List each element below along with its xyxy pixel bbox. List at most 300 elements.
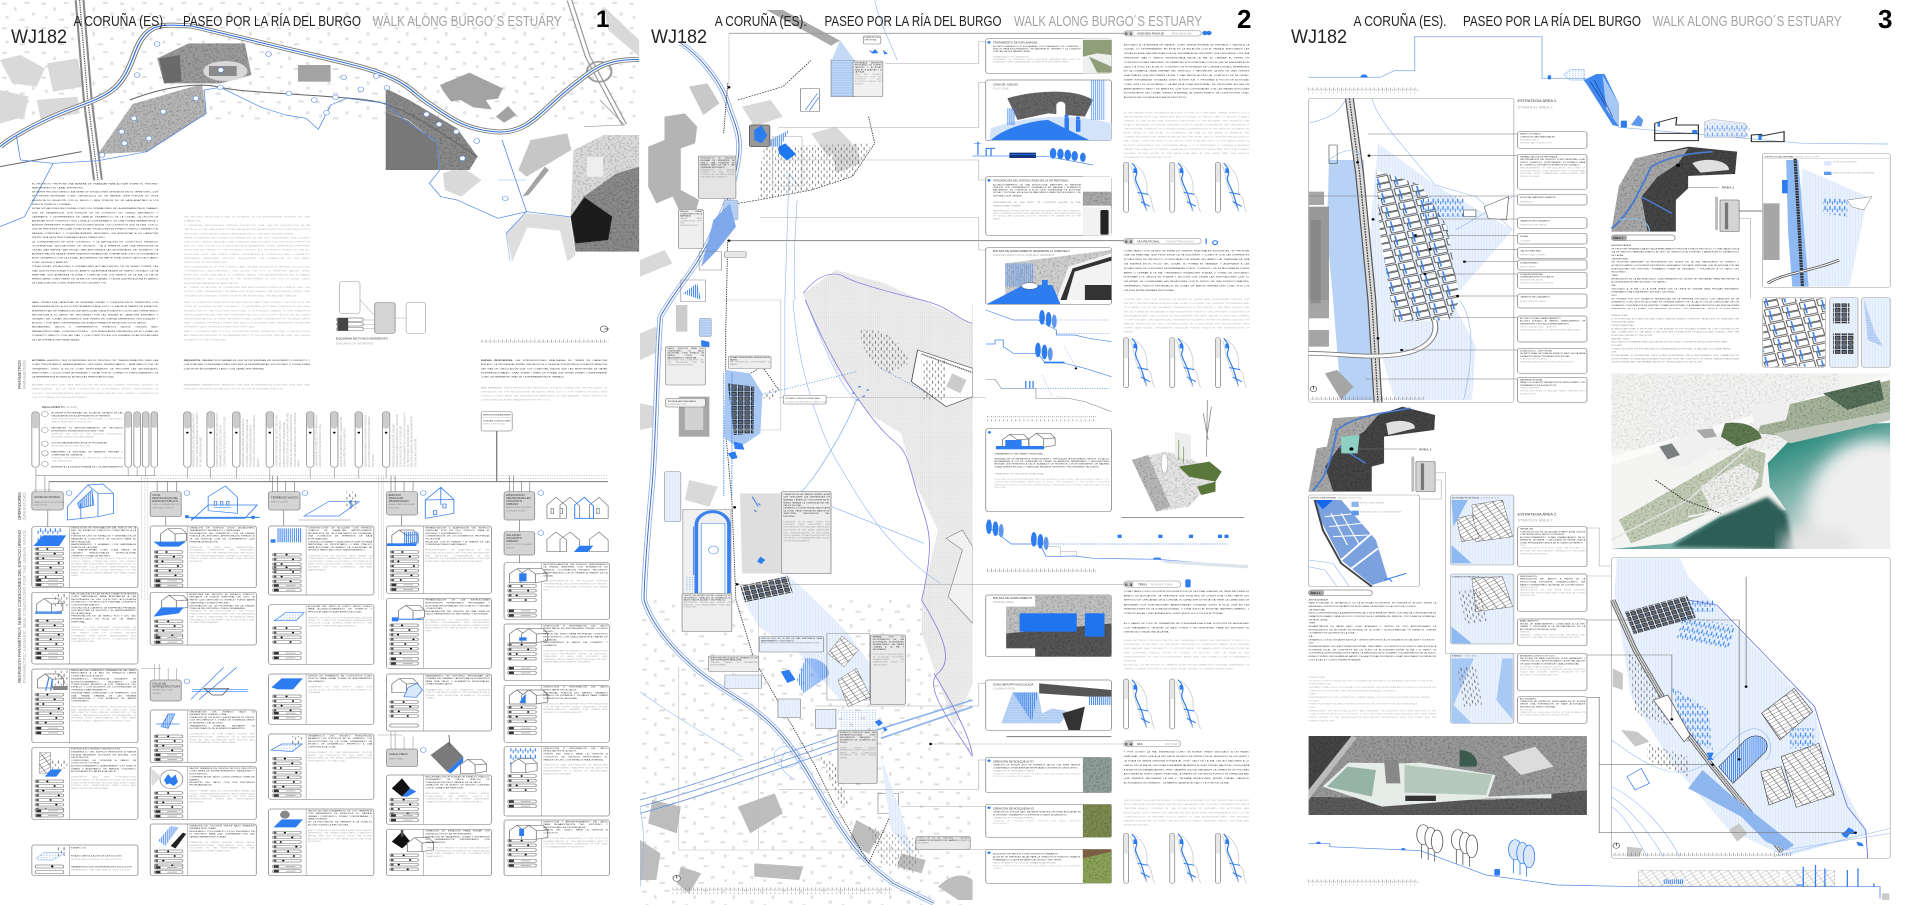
text area 1 english: IT IS PROPOSED A CONNECTED AND PUBLIC PARKING AREA TO IMPROVE THE ACCESS OF ROAD AND THE RESIDENTIAL AREA. [1611,318,1739,323]
card 1.1: DEMOLITION AND CONNECTION OF THE SITE IN THE PUBLIC SPACE CONNECTED WITH THE STREET. MOVING THE SPACE AND GENERATING STOPS TO NEIGHBOUR COLLECTIVES. MAINTENANCE AND FINISH WITH NOBLE LOCAL MATERIALS OF THE AREA. PRODUCE GREEN AREAS FOR TRADITIONAL CARE. [71,557,136,577]
text ria spanish: Y POR ÚLTIMO LA RÍA. ENTENDIDA COMO UN BORDE GRATO ASOCIADO A UN PASEO PEATONAL, PERO QUE A LA VEZ SIRVE DE NEXO DE UNIÓN CON EL MUNICIPIO DE CULLEIRO Y LA PLAYA DE SANTA CRISTINA SITUADA AL OTRO LADO DE LA RÍA. LAS ACTUACIONES A LO LARGO DE LA RÍA SE VINCULAN FUNDAMENTALMENTE A LA ACTIVIDAD NÁUTICA O PESQUERA A NIVELES DE EMBARCADERO, PERO TAMBIÉN LÚDICA, MEDIANTE LA CREACIÓN DE PISCINAS ASOCIADAS AL NUEVO PASEO PEATONAL. A TRAVÉS DE DISTINTOS PUNTOS SE OBRA UNA RED QUE PERMITE RECORRER LA RÍA Y CELEBRA RELACIONES ENTRE PLAYAS, PAISEOS, ACTIVIDADES CULTURALES... DESARROLLADAS A UN LADO Y A OTRO DE LA RÍA. [1124,751,1249,784]
card: bolsas de aparcamiento 2: BOLSAS DE APARCAMIENTO [993,596,1032,600]
diagram of working [336,282,426,346]
plan: scale [1311,397,1425,402]
card: creacion de bosque bajo: CREACIÓN DE BOSQUE BAJO MEDIANTE MURETES, MIXTURAS ASOCIADAS EN EL ENTORNO. TRATAMIENTO CON ESPECIE LOCALES DE ARBUSTOS. [993,811,1081,816]
tag area 1 [1611,235,1675,241]
text area 2 spanish: AVENIDA PASAJE [1309,599,1328,601]
box: parcelacion: PARCELACIÓN [1520,576,1537,578]
text area 1 english: IN THE AREAS OF RESIDENTIAL USES, A NEW RESIDENTIAL USE IS ENCOURAGED WITH CHARACTER OF DEVELOPMENT. HOUSING ACTIONS ARE PROPOSED WITH THE COMPLICITY OF USERS, GARDEN SPACES AND SPORTS AREAS, AND THE REHABILITATION OF THE BUILDINGS ON THE SLOPE. [1611,355,1739,363]
middle band panel 1: parameters and operators [32,282,609,600]
card 4.4: CREACIÓN DE UN MUNDO DE NIVELES COMUNES CON EL CARÁCTER REMOLINO. [425,784,490,789]
diagram of working: ESQUEMA DE FUNCIONAMIENTO [336,337,389,341]
rules legend: RESPECT THE IDENTITY OF THE ROOFS, THE STONE AND THE LANDSCAPE [51,457,123,462]
scale bar [481,339,608,345]
strategy tile: actividad economica: ACTIVIDAD ECONÓMICA [1452,497,1479,499]
text area 1 spanish: RÍA [1611,285,1615,287]
text area 2 english: TRAIN [1309,693,1316,695]
strategy tile: actividad economica [1451,495,1514,565]
operator: calle ciega: PARTY WALL [389,758,405,760]
title panel 3: WALK ALONG BURGO´S ESTUARY [1653,13,1842,30]
plan: large factory [648,113,699,213]
text area 1 english [1611,314,1739,368]
box: zona residencial: VIVIENDA EN ESTOS LLANOS [1520,276,1553,278]
rules legend: MANTENER LA IDENTIDAD DE PAISAJES, PIEDRAS Y CUBIERTAS DE CUBIERTA [51,451,123,456]
small maps road [1124,162,1247,212]
section tag 01 avenida pasaje: 01 [1125,31,1133,36]
card 1.1: DEMOLICIÓN DE INTEGRACIÓN DEL HUECO EN LA RED DE ESPACIOS PÚBLICOS CONECTADOS A LA CALLE. [71,527,136,535]
text tren english: A RAIL NETWORK CROSSES THE PROJECT AREA AND CONNECTING DIFFERENT TOWNS. IT IS PRETENDED TO BE PART OF THE WIDER NETWORK OF COMMUTER TRAINS OF A CORUÑA. THIS RAILWAY HAS THE ABILITY TO INCORPORATE TWO ABANDONED CONSTRUCTIONS AS NEW STOPPING PLACES CLOSE TO POINTS OF ACTIVITY, ONE OF THEM IN THE SURROUNDINGS OF THE OLD INDUSTRIAL AREA, AND THE OTHER CLOSE TO MATERNITY HOSPITAL. [1124,639,1249,662]
intro text english: THE CONSIDERATION OF THIS CONTEXT, AND THE AMPLIFICATION OF PRIVATE COLLECTIVES, COOPERATIVES, ASSOCIATIONS,... WILL ALLOW THE CITY TO RESPOND FASTER, MORE EFFECTIVE, MORE ADAPTABLE TO CURRENT NEEDS. THE ADMINISTRATION HAS A SHARED RESPONSIBILITY WITH CITIZENS IN THE DEVELOPMENT OF THE CITY, IN SOME CASES WORKING AS MANAGER OR ARBITRATOR. [184,266,310,284]
area 1 summary box [1715,197,1762,298]
card 5.2: CESIÓN DEL SUELO PARA PROPIEDAD Y HUERTOS EN CONJUNTO, CON UNA CONEXIÓN A TRAVÉS DE LA UNIDAD. [543,633,608,641]
card 1.5: legend: PARÁMETROS QUE INTERVIENEN EN LA SOLUCIÓN [71,866,132,868]
title panel 1: A CORUÑA (ES). [74,13,166,30]
card: alquiler de vacios [986,849,1111,883]
operator cards panel 1 lower rows [32,563,609,876]
intro text english: THE PROJECT PROPOSES A WAY OF WORKING IN THE ENVIRONMENT KEEPING ITS OWN CHARACTER. [184,216,310,222]
card 1.5: legend: EJEMPLO 1/1 [71,848,87,850]
box: aprovechamiento: BOLSA DE APARCAMIENTO CONECTADA A LA RED VIARIA Y VINCULADA A LA REVITALIZACIÓN DE LA ACTIVIDAD ECONÓMICA LOCAL. [1520,623,1585,631]
aerial photo area 2 lots [1309,736,1587,815]
card: creacion de bosque bajo [986,804,1111,837]
box: parcelacion: PARCELLATION [1520,587,1538,589]
render: green land [1619,447,1766,543]
box: apeadero centro de ocio [1518,653,1587,691]
text area 2 spanish: DESARROLLO DE ACTIVIDADES NÁUTICA Y CENTRO DEPORTIVO A LOS USUARIOS DE CALLAGE Y COLEGIOS. [1309,639,1435,641]
card: tratamiento de explanadas: TRATAMIENTO DE EXPLANADAS [993,41,1038,45]
card 3.5: EMPTY SPACES CONDITIONING LAND WITH WASTE MATERIALS, THE URBAN LANDSCAPE, COMMUNITY AREAS, AND FOR HOUSING. FROM THE ROUTE ALLOWS ACCESS TO THE AREA FROM THE ROAD NETWORK. [308,829,372,843]
plan: houses grid [1376,170,1460,322]
text area 1 spanish: REUBICACIÓN DE LA ANTIGUA CALLE COMO APEADERO DE LA RED DE CERCANÍAS, PARA FAVORECER LA ACCESIBILIDAD ENTRE LA CHUAC Y EL BARRIO. [1611,278,1739,283]
callout: sports neighbourhood: OPENING LINKED TO PROPERTIES DEVELOPMENT. [710,662,758,666]
rules legend [32,405,123,469]
card 5.1 [504,563,609,619]
title panel 3: PASEO POR LA RÍA DEL BURGO [1463,13,1641,30]
box: parcelacion: PARCELLATION OF THE AREA FROM EXISTING STRUCTURE DEVELOPING FACTORIES AND ALLOWING RESOURCES. [1520,589,1585,597]
card 2.3: CREACIÓN DE UN PUNTO SINGULAR EN EL CRUCE, CON RECORRIDOS Y ZONAS DE ESTANCIA DESDE EL MOMENTO DEL ACCESO. [189,716,255,724]
actors text: ACTORES: AGENTES QUE INTERVIENEN EN EL PROCESO DE TRANSFORMACIÓN, BIEN SEA COMO PROPIETARIOS, ARRENDATARIOS, GESTORES, BENEFICIARIOS,... ARBITRADOS POR UN ORGANISMO JUNTO A ELLOS COMO RESPONSABLES DE RECOGER LAS NECESIDADES, PERICIONES O SOLUCIONES APORTADAS Y VELAR POR EL CORRECTO FUNCIONAMIENTO DE LA HERRAMIENTA EN BASE A LAS REGLAS PREESTABLECIDAS. [32,359,158,378]
box: zona desnivel: ZONA DESAHÍO [1520,262,1539,265]
card 4.1: REHABILITACIÓN O ADAPTACIÓN DEL EDIFICIO SINGULAR POR UN USO PÚBLICO PARA EL ENTORNO Y EQUIPAMIENTOS. [425,527,490,535]
card 4.3: DISMANTLING OF THE PREMISES. PROMOTE PUBLIC USE AND FORMS OF THE ELEMENTS FOR A STREET AND MUNICIPAL ELEMENTS, SOJOURN ZONES. [425,689,490,699]
card: tratamiento del paseo peatonal: INTEGRACIÓN DE PAVIMENTOS HORIZONTALES Y VERTICALES (ESCENTRALES, MUROS, ZÓCALOS, MEDIANERAS) A LOS DE CUBIERTAS DE LIBRAR UN AMBIENTE PAVIMENTADO Y ADECUACIONES MEDIDAS QUE PERMITEN LA CALLE. ACABADOS DE HORMIGÓN CON RECUBRIMIENTO DE MADERA, ZONAS VERDES EN SUELO Y PARCELAS MEDIANTE CÉSPEDES Y RECUBRIMIENTO AL BORDE. [994,458,1109,468]
operator: calle ciega [378,732,487,773]
card 5.3: PROPIEDAD PÚBLICA DEL BARRIO, GANANDO ESPACIO DE ESTANCIA Y VISUALES PARA CUBRIR ELEMENTOS DE LA UNIDAD. [543,692,608,700]
box: zona desnivel: EMPTY AREA [1520,266,1536,269]
actors text: ACTORS: ENTITIES THAT TAKE PART IN THE PROCESS AS OWNERS, RENTERS, AGENTS OR BENEFICIARIES... ALL OF THEM CONTROLLED BY A DIFFERENT AGENCY RESPONSIBLE OF COLLECT THE REQUIREMENTS, AND SOLUTIONS AND ENSURE THE CORRECT OPERATION OF THE TOOL BASED ON THE RULES PRESET. [32,384,158,399]
site plan panel 2 [640,0,1124,905]
callout: maintenance: FIXED POINTS IN THE NETWORK OF PEDESTRIAN ROUTES. [761,642,820,644]
plan: large dashed guide rectangle [679,33,973,850]
operator: terrenos vacios [269,491,359,520]
plan: radial view lines [761,368,946,543]
text area 2 english: PEDESTRIAN ROAD [1309,683,1331,685]
card 3.3: TRANSFER OF THE EMPTY LAND FOR COLLECTIVES, AS POINTS FOR SETTLEMENT OF THE AREA. [308,686,372,694]
operator: solar en conjunto urbano [504,531,608,555]
box: actividades: CREATION OF SINGULAR POINTS IN THE BORDER OF ROUTES DEVELOPING ROOMS ACTIVITIES. [1520,712,1585,716]
box: barrera vegetal: BARRERA VEGETAL [1520,379,1543,381]
section drawing: avenue [973,142,1093,165]
card 5.2: DEMOLITION AND INTEGRATION OF THE RESULTING VOID INTO PROPERTIES UNITED IN NETWORK. TRANSFER OF LAND FOR PROPERTY AND GARDENS, WITH CONNECTION THROUGH THE UNIT. MAINTENANCE IN CHARGE OF USERS. [543,650,608,663]
plan: north arrow [1310,386,1317,392]
text area 1 spanish [1611,244,1739,309]
label area 1: ÁREA 1 [1722,186,1735,190]
right column panel 2: project cards [973,39,1248,883]
label operadores: OPERATORS [22,492,27,520]
box: parcelacion: PARCELACIÓN DEL ÁMBITO A PARTIR DE LA ESTRUCTURA EXISTENTE, DESARROLLANDO LAS NAVES Y PERMITIENDO LA UNIDAD DE LOS RECURSOS. [1520,578,1585,586]
text area 2 english: THE MAIN CONNECTED TO A CORUÑA, IT IS CONSIDERED THE PEDESTRIAN AND CYCLING ROUTES FROM THE OTHER END OF THE ZONE. THEY HAVE A DIFFERENT AREA AND CONTINUITY. [1309,687,1436,692]
intro text continuation spanish [32,301,158,347]
text avenida english: IN THE PASAJE ROAD, ENTRANCE AND EXIT TO THE CITY, THE MAIN CHARACTERISTIC IS ITS RELATIONSHIP WITH THE LANDSCAPE AND ITS VIEWS TO THE ESTUARY. IT CAN BE CLEARLY THANKS TO THE SLOPE THAT STRONGLY DESCENDS TO THE ESTUARY. THE ORDER BY THE ROAD IS RELEASED OF MINOR CONSTRUCTIONS IN ORDER TO INCREASE THE PRESENCE OF THE HOSPITAL COMPLEX OF CORUÑA (CHUAC), A REFERENCE IN THE REGION, SITUATED ON BOTH SIDES OF THE ROAD. TO ELIMINATE THE CAR OF THE AREA, TO IMPROVE THE CONNECTION WITH THE GREEN ROADS ALONG THE RIVER, AND TO GIVE BETTER ACCESS TO THE CHUAC, OVER THE FREE PLOTS NEXT TO THE ROAD AND NEXT TO THE MAIN POINTS OF ACTIVITY (HOSPITALS, OLD INDUSTRIAL AREA...), IT IS PROPOSED TO CREATE A PARKING UNDER THE SHADOW OF TREES, CREATING A CONTINUOUS LANDSCAPE WITH THE FOREST LOCATED IN THE SLOPE OF THE AREA THAT ARE, AT THE SAME TIME, THE VEHICLE ENTRANCES TO THE PROJECT SITE. [1124,112,1249,159]
card 5.5: DEMOLICIÓN Y AMORTIGUAMIENTO DEL VACÍO PARA REHABILITACIÓN DEL ENTORNO Y APROVECHAR LAS PROPIEDADES. [543,821,608,829]
plan: neighbourhood blocks [640,600,973,905]
render: trees [1721,423,1762,447]
map: factory building [440,73,549,197]
plan: estuary [803,270,973,727]
map: sports complex photo [157,43,331,83]
label respuesta parametrica: RESPUESTA PARAMÉTRICA. NUEVAS CONDICIONES DEL ESPACIO URBANO [17,529,22,683]
text area 2 spanish: USO [1309,642,1314,644]
section tag 02 via peatonal: 02 [1125,239,1133,244]
box: hospital materno-infantil: HOSPITAL MATERNO-INFANTIL [1520,196,1557,199]
callout: south west text [682,593,732,632]
plan: railway [1349,98,1378,402]
icon: dark roof with blue wall [431,735,487,773]
text area 2 english: USES [1309,707,1315,709]
section tag 04 ria: 04 [1125,742,1133,747]
area 2 summary box [1411,457,1518,653]
text area 2 english [1309,676,1436,730]
plan: scale bar [673,887,893,894]
box: aprovechamiento [1518,619,1587,646]
callout: promenade view [783,395,826,404]
section blue figures [1796,865,1874,887]
box: actividades: ACTIVITIES [1520,709,1533,711]
requisite pills with vertical text: CARÁCTER Y SUPERFICIE DEL VACÍO. RELACIÓN CON LAS VÍAS DE CIRCULACIÓN Y CON LOS ESPACIOS COLINDANTES, PENDIENTE DEL TERRENO Y VISTAS HACIA LA RÍA CHARACTER AND SURFACE OF THE VOID. RELATIONSHIP WITH THE ROUTES AND NEIGHBOURING SPACES, SLOPE AND VIEWS [276,413,300,467]
box: aprovechamiento: PARKING CONNECTED WITH ROAD NETWORK AND LINKED TO REVIVAL OF LOCAL ECONOMIC ACTIVITY. [1520,634,1585,639]
card 5.2 [504,624,609,681]
box: barrera vegetal: PROTECTED AREA OF RAILWAY TRAIN, TREATED WITH EUCALYPTUS. [1520,390,1585,395]
card: creacion de bosque alto: CREACIÓN DE BOSQUE ALTO EN TERRENOS VACÍOS CON FINES PASIVOS. CONSERVANDO ZONAS ABIERTAS RESPETADAS CON ESPECIE COMUN DE RÍO. [993,764,1081,769]
text tren english [1124,639,1249,674]
plan: access road [1309,320,1435,356]
text area 2 english: DIMENSIONING THE INDUSTRIAL ACTIVITY AND RENEWING THE BUILDINGS WITH NEW SERVICES TO THE LOCAL ECONOMY. AN ACTIVITY NETWORK IS BUILT BETWEEN ESTUARY AND PASSAGE, WITH NEW GREEN SPACE OPENED TO THE NEIGHBOURHOOD AND BETTER RELATIONSHIP WITH THE STREET AND THE PRESENT LANDSCAPE. [1309,710,1436,722]
operator: naves en ruinas: ABANDONED INDUSTRIAL [34,501,66,504]
plan: industrial building [679,397,709,437]
map: main road with promenade [0,25,639,147]
card 4.5: ELEVACIÓN DE PAISAJISMO, ZONAS Y SUPERFICIE DE CERRAMIENTOS PRESENTANDO CON TRATAMIENTOS. [425,836,490,844]
card 1.5: legend [32,845,138,876]
box: zona residencial [1518,272,1587,288]
small maps estuary [1124,833,1247,883]
title panel 2 [651,4,1251,48]
callout: sports neighbourhood [709,656,759,671]
divider [1122,516,1244,518]
card 2.2 [150,592,256,645]
card 3.2: RENTING OF THE VOID FOR A SHORT AND MEDIUM TERM, TO CONDITION VEGETABLE GARDENS AND PRODUCE LOCAL AGRICULTURAL ACTIVITY. THE COMMUNITY PAYS THE MAINTENANCE. [308,617,372,627]
text via peatonal spanish: CONECTANDO CON LA RED DE ESPACIOS VERDES PEATONALES EXISTENTES, SE PROPONE UNA VÍA PEATONAL QUE PROLONGUE LA YA EXISTENTE Y CONECTE CON LAS DIFERENTES SITUACIONES DE PROYECTO, POTENCIANDO LA UNIDAD DEL ÁMBITO. AL TRAVESAR DE UNA VÍA INSERTA EN EL FLUJO DEL LUGAR, SU FORMA ES VARIABLE Y ADAPTABLE A LAS SITUACIONES DE CONTORNO DETERMINADAS POR EL CONTEXTO. DE ESTA FORMA SE PUEDE ABRIR O CERRAR A LA RÍA, ORIGINANDO ENSANCHES PLAZAS O ZONAS DE DESCANSO, INTEGRAR LOS VACÍOS EN PLANTA Y SECCIÓN QUE DEJAN LAS EDIFICACIONES QUE LO DELIMITAN, SE CONSIDERAN LAS RELACIONES CON EL RESTO DE VÍAS ESTRUCTURANTES, GENERANDO PUNTOS DESTACADOS EN ZONAS DE MAYOR INTERACCIÓN COMO SON LOS CRUCES ENTRE INFRAESTRUCTURAS. [1124,250,1249,292]
operator: edificacion en conjunto urbano [504,491,608,520]
heading strategy area 2: ESTRATEGIA ÁREA 2: [1518,513,1557,516]
scale bar [1308,87,1419,93]
requirements text: REQUISITOS: PARÁMETROS VARIABLES QUE SE DETERMINAN EN UN MOMENTO CONCRETO, Y QUE EVALÚAN CONSIDERACIONES ENTORNO A DETERMINADAS SOLUCIONES O SITUACIONES QUE SE ESTÉN DESARROLLANDO CON CARÁCTER GENERAL. [184,359,310,370]
text area 2 spanish [1309,598,1436,672]
callout: north lot text: PARK AND TERRACE CONNECTED WITH THE CORRIDOR AND ACTIVITIES TO ADAPT THE SQUARE. [855,74,882,85]
small strategy tiles area 1 [1762,298,1890,367]
aerial photo area 2 [1309,407,1435,492]
operator: usos destacados: USOS DESTACADOS DEL ESPACIO PÚBLICO [152,494,178,503]
strategy plan area 2: GENERAL STRUCTURE [1337,497,1363,499]
card 2.3: TRATAMIENTO ESPACIAL MEDIANTE LA INCORPORACIÓN DE ELEMENTOS ABIERTOS. [189,725,255,730]
plan connector lines [729,33,1124,849]
card: tratamiento de explanadas [986,39,1111,73]
card 5.4 [504,747,609,816]
icon: blue single building [425,487,454,518]
box: pantallas: PANTALLAS [1520,528,1533,530]
box: hospital materno-infantil [1518,194,1587,205]
card 2.4: EMPTY URBAN LAND IN CROSSROADS AREAS AS PUBLIC ENTERTAINMENT AREA, LANDSCAPING AND MIXED USES. COHERENCE OF THE VOID WITH NEIGHBOURHOOD SPACE AND ENVIRONMENT RESPONSE. [189,790,255,803]
box: zona desnivel [1518,260,1587,270]
text area 1 english: CONNECTED WITH THE ESTUARY AND ITS GREEN AREA, A PROPOSAL OF NATURAL POOLS AND PATHS. [1611,348,1731,350]
intro text spanish: ESTAS SITUACIONES RECOGIDAS COMO LOS OPERADORES DE LA HERRAMIENTA DE TRABAJO QUE SE DESARROLLA, SON FUNCIÓN DE UN CONTEXTO NO VISIBLE, ABSTRACTO Y CAMBIANTE, Y DETERMINANTE DE CARA AL DESARROLLO DE LA CIUDAD. LA OPCIÓN DE ABORDAR ESTE CONTEXTO NOS LLEVA A CONSIDERARLO DE UNA FORMA PARAMÉTRICA Y ADMITIR DIFERENTES POSIBLES SOLUCIONES SEGÚN LOS CONTEXTOS QUE SE DEN, CON LO QUE SE PRETENDE VINCULAR TODAS ESTAS SITUACIONES AL ESPACIO PÚBLICO CREANDO UN PAISAJE CONECTADO Y CONSTANTEMENTE RENOVADO, SIN RENUNCIAR A SU CARÁCTER PROPIO NI A LA ESTRUCTURA BÁSICA DEL TERRITORIO. [32,207,158,239]
requisite pills with vertical text: AFECCIÓN DE SERVIDUMBRES Y ORDENACIÓN URBANA AFFECTION OF EASEMENTS [340,417,347,467]
section tag 04 ria: RÍA [1137,742,1143,746]
card 1.4: EDIFICACIÓN Y NUEVA CONSTRUCCIÓN. [71,748,121,750]
render: city texture [1611,373,1840,450]
callout: industrial [666,347,705,385]
box: apeadero centro de ocio: RECYCLING OF EXISTING WAREHOUSE AS STOPPING PLACE AND LEISURE CENTER, BECAUSE OF THE REVIVAL OF ECONOMIC ACTIVITY. [1520,669,1585,676]
callout: path to estuary: CREATION OF A PATH OVER THE ESTUARY THAT UNCOVERS THE DIFFERENCES OF TIDES AND PARKS AND RECOVERS IN THE SAME LANDSCAPE THE COMMUNICATION OF THE RIVER. DEVELOPMENT OF NAUTICAL ACTIVITY IN THE AREA, FOR MANAGERS AND RULES OF THE ENVIRONMENT. [783,521,830,542]
plan: blue housing cluster [724,370,779,497]
card: zona de juegos: ZONA DE JUEGOS [993,83,1018,86]
plan: athletics track [682,509,732,594]
card 3.4: DESARROLLO DEL MODELO RESIDENCIAL BAJANDO LOS PÓRTICOS EN EL TERRENO, LOS PRODUCTORES EN LA ZONA, GENERANDO UN MODELO DE DESARROLLO RESPECTO A UNA CONEXIÓN A LA LOCAL. [308,735,372,748]
plan: central wooded zone [749,125,873,200]
card 4.5: CREACIÓN DE ESPACIOS PARA EVITAR LOS OBSTÁCULOS DE LAS PROPIEDADES. [425,830,490,835]
intro text spanish: LA CONSIDERACIÓN DE ESTE CONTEXTO, Y LA AMPLIACIÓN DE COLECTIVOS PRIVADOS, COOPERATIVAS, ASOCIACIONES DE VECINOS,... VA A PERMITIR DAR UNA RESPUESTA DE CIUDAD MÁS RÁPIDA, MÁS EFICAZ, MÁS ADECUADA A LAS NECESIDADES DEL MOMENTO. LA ADMINISTRACIÓN PASA A TENER UNA RESPONSABILIDAD COMPARTIDA CON LOS CIUDADANOS EN EL DESARROLLO DE LA CIUDAD, ADQUIRIENDO EN PARTE, EN ALGUNOS CASOS, ACTUANDO COMO GESTOR O ÁRBITRO. [32,241,158,264]
card 2.2: OPENING OF THE ENCLOSURE TO THE PUBLIC SPACE THROUGH TEMPORARY USE. THE MANAGER MAY OPEN A CAFETERIA OR RECREATION AREA. INTEGRATION OF PROPERTY WITH THE PUBLIC UNIT OF THE ENVIRONMENT. [189,610,255,624]
callout: maternity hospital [666,398,705,407]
plan: railway diagonal [1613,600,1782,852]
requirements text [184,359,310,397]
isometric render [1132,400,1222,512]
label area 2: ÁREA 2 [1419,448,1432,451]
strategy plan area 2: ESTRUCTURA GENERAL [1360,502,1384,504]
requisite pills with vertical text [184,412,426,468]
strategy tile: general [1451,653,1514,723]
box: zona ludico deportiva: SE ARTICULAN LA ZONA DE ESPACIO BAJO LA VÍA PARA DESARROLLAR ACTIVIDADES DEPORTIVAS. [1520,353,1585,358]
plan: roads [640,43,973,903]
text area 1 spanish: USO [1611,295,1617,297]
long section [986,519,1248,568]
callout: north lot text: EXPLANADA ANTERIOR RESGUARDO DE TORRES PARQUES Y ACTIVIDAD SIMPLES A ADAPTAR Y A LA PLAZA. [855,62,882,73]
overall strategy plan area 1: ESTRUCTURA GENERAL [1765,156,1794,158]
plan: connectors [1587,577,1856,833]
card 1.3: REGULACIÓN, CUBIERTA Y ORDENACIÓN DEL VACÍO RESULTANTE A LA RED DE ESPACIOS LIBRES CONECTADOS A LA CALLE. [71,669,136,677]
rules legend: KEEP THE PROXIMITY FROM THE ESTUARY TO THE PUBLIC SPACE, ADAPTING TO THE SLOPE [51,418,123,423]
card: integracion del antiguo pazo: REFURBISHING OF AN EXISTING STRUCTURE, KEEPING ITS PUBLIC MEMORY, WITH CLOSURES OF WOOD AND MATURED ELEMENTS. BECOMES A PLATFORM OF SOCIAL AND CULTURAL ACTIVITY, KEEPING THE CHARACTER OF THE SPACE. [993,210,1081,220]
card 4.2: REHABILITATION OF RESISTANT STRUCTURES ALLOWING PROGRAMMES AND REGISTERED ACTIVITIES, PUBLIC USE AND NEW CONNECTIONS. RESTORATION OF THE BUILDING TO THE STREET LINE. [425,619,490,632]
requirements text: REQUISITES: PARAMETERS VARIABLES THAT ARE DETERMINED AT A SPECIFIC TIME, AND THAT EVALUATE DIFFERENT SITUATIONS OR SOLUTIONS OF GENERAL POSITION. [184,384,310,390]
card 1.2: REUTILIZACIÓN DE LAS ESTRUCTURAS EXISTENTES COMO MATERIALES PARA ADAPTARLAS A LAS NECESIDADES DE USO COLECTIVO. ACTIVIDADES DE EMPLEO. LOS NEGOCIOS TENDRÁN CONVENIOS CON SUS EMPLEADOS. [71,593,136,606]
box: pantallas: ACONDICIONAMIENTO, ZONAS, EMBARCADERO, EN EL MIRADOR, ENTRADA Y VINCULADA DE RENTA, BUSCA ZONA. PÉRDIDA ENTORNOS EN EL SUEÑO DE MÉRITO. [1520,537,1585,544]
vertical side labels panel 1 [17,360,27,683]
callout: west: PARQUE LINEAL CONEXIONES CON LA BARRIADA. [680,211,702,217]
section tag 04 ria [1124,741,1181,747]
card 3.1: CONSTRUCCIÓN DE BLOQUES CON ESPACIO LIGADOS DE CARÁCTER AMORTIGUANTE. ENTENDIDOS EN LA ZONA BAJOS DE VIVIENDAS, UNA OCUPACIÓN DE TERRENOS DE BAJA EDIFICABILIDAD. [308,527,372,540]
overall strategy plan area 1: GENERAL STRUCTURE [1792,156,1820,158]
plan: northern blue lot [800,40,888,112]
overall strategy plan area 1: ESTRUCTURA GENERAL [1833,161,1857,163]
card 1.4: EDIFICATION AND NEW CONSTRUCTION. DEVELOPMENT OF RESIDENT BUILDING AT BIGGER SCALE WITH HIGH-RISE BLOCKS AND MIXED USES. FITTING OUT, LANDSCAPING FREE SOILS AND ADAPTING A CONCRETE PARK. [71,776,136,790]
plan: hatched area [1370,143,1513,400]
text area 2 spanish: EN SU CONVERGENCIA A LA BARRA RESIDENCIAL Y SE ELIMINA DEL PASEO CON UNA VÍA COMUNICADORA DE CARÁCTER URBANO, PARA UN FLUJO CONTINUO A LA COMPAÑÍA DEL PARQUE, CON ZONAS DE ESTANCIA Y VISTA DE LA RÍA. [1309,612,1436,621]
text area 1 spanish: VÍA PEATONAL [1611,258,1628,260]
title panel 1: WALK ALONG BURGO´S ESTUARY [373,13,562,30]
callout: west: LINEAR PARK CONNECTIONS WITH THE NEIGHBOURHOOD. [680,218,702,227]
box: plaza: SQUARE [1520,240,1531,242]
label parametros [17,360,27,389]
card: alquiler de vacios: ALQUILER DE PARCELAS VACÍAS PARA LA CREACIÓN DE HUERTOS URBANOS, FOMENTANDO LOCALES EN MANOS DEL VECINO Y RED VERDE. [993,856,1081,861]
box: apeadero centro de ocio: STOPPING PLACE-LEISURE CENTRE [1520,666,1562,668]
intro text spanish: EL PROYECTO PROPONE UNA MANERA DE TRABAJAR PARA ACTUAR SOBRE EL ENTORNO MANTENIENDO SU CARÁCTER PROPIO. [32,183,158,189]
box: plaza [1518,233,1587,244]
section tag 01 avenida pasaje: AVENIDA PASAJE [1137,32,1164,36]
card: alquiler de vacios: RENT OF EMPTY PLOTS TO WORK AS URBAN ROADGROWN, ENCOURAGING LOCALS. [993,865,1081,870]
title panel 3: A CORUÑA (ES). [1354,13,1446,30]
aerial render [1612,374,1890,549]
rules legend: ACCEDER A PROXIMIDAD DEL SOLAR AL USUARIO DE LAS VÍAS ADAPTACIÓN A LA PENDIENTE DE TERRENO [51,412,123,417]
plan area 2 frame [1611,558,1890,858]
tag area 2 [1309,590,1372,596]
card 2.4: RELACIÓN DEL VACÍO CON SUS ENTORNOS REORGANIZADOS. [189,781,255,786]
plan: roads and roundabout [1611,728,1890,857]
operator: edificio singular abandonado [387,487,454,518]
answer box [481,412,512,431]
text and renders lower panel 3 [1309,314,1920,858]
card 3.3: CESIÓN DE TERRENOS EN COLECTIVOS COMO PUNTOS PARA CREAR ZONAS DE ASENTAMIENTO DEL ESPACIO. [308,675,372,683]
card 1.4 [32,748,138,819]
new answers text: NUEVAS RESPUESTAS: LAS INTERVENCIONES REALIZADAS NO TIENEN UN CARÁCTER AISLADO, LA PROXIMIDAD ENTRE OBSTÁCULOS O LA RELACIÓN ENTRE ELLOS ANTIPLADA POR LAS VÍAS DE CIRCULACIÓN QUE LOS CONECTAN, HACEN QUE LAS RESPUESTAS SE VAYAN INTERRELACIONANDO UNAS SOBRE OTRAS DE FORMA QUE ÉSTAS DEBEN CONSIDERARSE COMO UN PARÁMETRO MÁS DE LA HERRAMIENTA DE TRABAJO. [481,359,607,378]
title panel 2: A CORUÑA (ES). [715,13,807,30]
card: bolsas de aparcamiento residentes [986,248,1111,304]
scale [986,567,1096,573]
card: bolsas de aparcamiento residentes: PARKING AREA FOR AL-SUBUELO RESIDENT [993,253,1055,257]
card: tratamiento del paseo peatonal: TREATMENT OF THE PEDESTRIAN ROAD [994,473,1044,475]
card 4.4: RECOVERY OF SPACES OF PUBLIC SPACE, OVERCOMING THE STREET, HOLES OF COMMUNICATION IN THE STREET LANDSCAPE. CREATION OF A WORLD OF COMMON LEVELS. [425,792,490,803]
box: plaza: PLAZA [1520,235,1528,238]
text area 1 english: PEDESTRIAN ROAD [1611,325,1634,327]
callout: rehabilitate warehouses: IT PROTECTS THE RECOVERY OF ECONOMIC ACTIVITIES, REHABILITATING THE WAREHOUSES LINKED TO THE ESTUARY. [873,654,904,666]
aerial photo area 1 [1611,147,1737,232]
operator: edificacion en conjunto urbano: ABANDONED BUILDING IN URBAN GROUP [506,507,532,512]
callout: maintenance [759,637,824,652]
plan: gray blocks [1613,668,1747,857]
box: parcelacion [1518,574,1587,611]
intro text continuation english: PART OF COMMUTER TRAIN SERVICE), AND THE ESTUARY THAT CONNECT THE SITE WITH THE TOWN OF CULLEIRO) AS ANY THE ABILITY TO GENERATE UNITY AND COHESION IN THE LAND REGARDLESS OF THE SOLUTION DEVELOPED. IT IS POSSIBLE THANKS TO THE TRANSITION SPACES-BUMPERS/VÍAS THAT PUT TOGETHER EACH SOLUTION WITH THE ROUTES, ALLOWING UNDERSTAND ALONG OF THEM THE IDENTITY AND UNITARY CHARACTER OF THE AREA, PATHS THAT CONSIDER DIFFERENT SPEED AND WAYS OF MOVEMENT AND THEREFORE DETERMINE DIFFERENT WAYS OF RELATIONSHIP WITH THE PLACE. [184,301,310,328]
card 3.1: CONSTRUCTION OF BLOCKS WITH SPACE OF CUSHIONING CHARACTER. UNDERSTOOD IN THE LOW-DENSITY ZONE OF HOUSING, OCCUPATION OF LAND WITH LOW BUILDING VOLUME. COUNTS WITH SUITABLE SOIL FOR COMMUNITY USE AND MAINTENANCE. [308,555,372,571]
callout: public spaces: PUBLIC SPACES UNDER INFRASTRUCTURES AS ROUTES, PARKS AND CONNECTION ELEMENTS OF THE URBAN FABRIC. [840,747,876,759]
plan: western strip [681,200,738,302]
strategy 2 boxes [1518,527,1587,611]
box: barrera vegetal [1518,377,1587,402]
card 1.2: UTILIZACIÓN A CUBIERTO DE EMPRESAS PRIVADAS, QUE ADOPTAN LA GESTIÓN Y EL MANTENIMIENTO DE LA PARCELA. [71,607,136,615]
box: actividades [1518,697,1587,723]
operator: edificio singular abandonado: EDIFICIO SINGULAR ABANDONADO [389,494,409,503]
box: paseo estuario: CONEXIÓN VÍAS PEATONALES [1520,136,1555,138]
plan: scale [1613,853,1792,858]
box: acceso rodado aparcamiento: VEHICULAR ACCESS · PARKING [1520,326,1556,328]
card: tratamiento del paseo peatonal: INTEGRATION OF HORIZONTAL AND VERTICAL ELEMENTS (PLATFORMS, WALLS, DIVIDING WALLS,...) TO CREATE AN ENVIRONMENT PAVED AND TO ADAPT THE ELEMENTS OF THE STREET. CONCRETE FINISHES WITH WOOD COVERING, GREEN AREAS, GRASS AND SOFT STONES THAT ARE PART OF THE NEW LINE. [994,479,1109,489]
card 2.4: COHERENCIA DEL VACÍO CON EL ESPACIO LIBRE DE BARRIO. [189,776,255,781]
box: zona residencial: RESIDENTIAL AREA [1520,279,1542,281]
callout: rehabilitate warehouses [871,635,905,704]
diagram of working: DIAGRAM OF WORKING [336,342,374,346]
text tren english: ALONG ALL OF THE ROUTE IS CREATED A PROTECTED AREA WITH VEGETAL TREATMENT OF TREES LOCATED IN SLOPE TO NOT BE A VISUAL OBSTACLE TOWARD THE ESTUARY. [1124,664,1249,670]
plan: top roads [1309,98,1513,400]
callout: gardens: GENERACIÓN DE JARDINES ESCENAS DE PENDIENTE DE SUELO, UNA CONEXIÓN DE ESPACIO BAJO LA VÍA Y LAS TERRAZAS DEL PUEBLO. [700,157,735,169]
rules legend: FAVORECER EL APROVECHAMIENTO DE RECURSOS EXISTENTES, EVITAR DEMOLICIONES Y RSU [51,427,123,432]
building section [1619,115,1888,144]
callout: public spaces [838,731,877,783]
label operadores: OPERADORES [17,492,22,520]
card 4.2: REHABILITACIÓN DE LAS ESTRUCTURAS RESISTENTES PERMITIENDO PROGRAMAS Y ACTIVIDAD REGISTRADAS. USO PÚBLICO Y NUEVAS CONEXIONES. [425,599,490,610]
callout: upper small [863,36,881,44]
card: zona de juegos [986,80,1111,141]
card 1.1 [32,527,138,588]
title panel 3: WJ182 [1291,27,1347,48]
box: zona ludico deportiva: ZONA LÚDICO - DEPORTIVA [1520,350,1552,352]
intro text english: THESE SITUATIONS RECOGNISED AS OPERATORS OF THE TOOL, DEPENDING ON A CONTEXT THAT IS NOT VISIBLE, ABSTRACT AND CHANGING, AND DECISIVE FOR THE DEVELOPMENT OF THE CITY. THE CONTEXT IS CONSIDERED AS A PARAMETRIC FORM, GENERATING DIFFERENT SOLUTIONS ACCORDING TO THE POSSIBLE CONTEXT, ALL THE MORE POSSIBLE TO LINK ALL SOLUTIONS WITH THE PUBLIC SPACE, GENERATING A CONNECTED AND CONSTANTLY RENOVATED LANDSCAPE, WITHOUT RENOUNCING THE CHARACTER OR THE BASIC STRUCTURE OF THE TERRITORY. [184,237,310,264]
label respuesta parametrica [17,529,27,683]
box: zona ludico deportiva [1518,348,1587,373]
scale [986,416,1096,421]
card 5.3: DEMOLITION AND INTEGRATION OF THE RESULTING VOID IN THE STREET. PUBLIC PROPERTY OF THE NEIGHBOURHOOD, GAINING STAY SPACE AND VISUALS TO COVER ELEMENTS. [543,703,608,714]
requisite pills with vertical text: ESTADO DE CONSERVACIÓN DE LA ESTRUCTURA Y CERRAMIENTOS EXISTENTES STATE OF CONSERVATION OF THE EXISTING STRUCTURE [216,413,226,467]
operator: calle ciega: CALLE CIEGA [389,752,408,756]
requisite pills with vertical text: IDENTIDAD DE LA EDIFICACIÓN, INTERÉS PATRIMONIAL, MEMORIA INDUSTRIAL Y RELACIÓN CON EL PAISAJE DE LA RÍA. GRADO DE APROVECHAMIENTO DE LA ESTRUCTURA IDENTITY OF THE BUILDING, HERITAGE INTEREST, INDUSTRIAL MEMORY AND RELATIONSHIP WITH THE ESTUARY LANDSCAPE [392,413,417,467]
card 2.5 [150,824,256,876]
plan: north arrow [1613,843,1620,848]
text area 1 english: RELOCATION OF A ABANDONED BUILDING AS A STOP PLACE TO IMPROVE THE ACCESS FROM TRAIN. [1611,341,1728,343]
strategy tile: parcelacion: PRESENT ELEMENTS [1479,576,1501,578]
card 2.1: INTEGRACIÓN DEL PERÍMETRO CON LA UNIDAD PÚBLICA DEL ENTORNO. APERTURA DEL ESPACIO A LA VÍA PÚBLICA, CON UN CERRAMIENTO QUE PERMITA LA RELACIÓN. [189,532,255,543]
heading strategy area 2 [1518,513,1557,523]
card 2.2: INTEGRACIÓN DE LA PROPIEDAD EN LA UNIDAD PÚBLICA DEL ENTORNO. PUEDE SEPARARSE. [189,605,255,610]
card 5.1: RECONFIGURACIÓN DEL EDIFICIO MANTENIENDO LA UNIDAD ARBÓREA, CON ELEMENTOS DE GRADOS. CO-CREACIÓN PRIVADO RECURSOS. APERTURACIÓN CON EL PASAJE A TRAVÉS DE LA UNIDAD. [543,563,608,577]
card: creacion de bosque alto: CREATION OF HIGHLAND FOREST IN EMPTY LAND AND AREAS WITH PASSIVE PURPOSES, KEEPING OPEN AREAS. [993,773,1081,778]
callout: path to estuary: CREACIÓN DE UN CAMINO SOBRE LA RÍA QUE DESCUBRE LAS DIFERENCIAS DE MAREAS Y APARCOS Y RECUPERE EN EL MISMO PAISAJE LA COMUNICACIÓN DEL CAUCE FLUVIAL. [783,494,830,507]
callout: gardens: GENERATION OF GARDEN SCENES OF SOIL SLOPE, CONNECTION OF SPACE UNDER THE ROAD AND TERRACES. [700,169,735,178]
card 1.4: CONDICIONES DE VIVIENDA A CARGO DE COLECTIVOS Y OTROS. [71,759,136,764]
section warehouse [1638,871,1835,886]
card 5.5 [504,820,609,876]
connection bus lines [36,431,608,600]
card 2.2: APERTURA DEL RECINTO AL ESPACIO PÚBLICO, MEDIANTE LA CESIÓN TEMPORAL DEL USO. LA PARTE QUE GESTIONE EL ESPACIO PUEDE ABRIR CAFETERÍA O ZONA DE RECREO. [189,593,255,604]
card: creacion de bosque bajo: CREATION OF LOWLAND FOREST [993,817,1034,819]
text area 1 english: RAILWAY TRAIN [1611,338,1629,340]
callout: south west text: RECREATION CENTRE AND SPACES OF MEETING, LOW DEVELOPMENT, VOIDS AND PUBLIC USE. [684,602,731,608]
small maps train [1124,679,1201,729]
intro text english [184,215,310,301]
text area 2 spanish: RÍA [1309,636,1313,638]
card 1.4: DESARROLLO DEL EDIFICIO RESIDENTE A MAYOR ESCALA MEDIANTE BLOQUES EN ALTURA, CON USOS MIXTOS. [71,751,136,759]
callout: upper small: PLAZA DE USO DEPORTIVA [864,37,880,41]
intro text english: ALL THESE SITUATIONS OF OPERATORS ARE ARTICULATED WITHIN A COMMON LINK, THE ROUTES THAT ORGANIZE ALL THE AREA (THE ROAD PASAJE, THE PEDESTRIAN STREET THAT CROSSES THE ZONE AND CONNECTS WITH THE RIVER WALK, THE RAILWAY TRAIN AS [184,286,310,297]
label parametros: PARÁMETROS [17,360,22,389]
card 1.5: legend: EN AZUL: ARTICULACIÓN DE LA SOLUCIÓN [71,855,122,858]
